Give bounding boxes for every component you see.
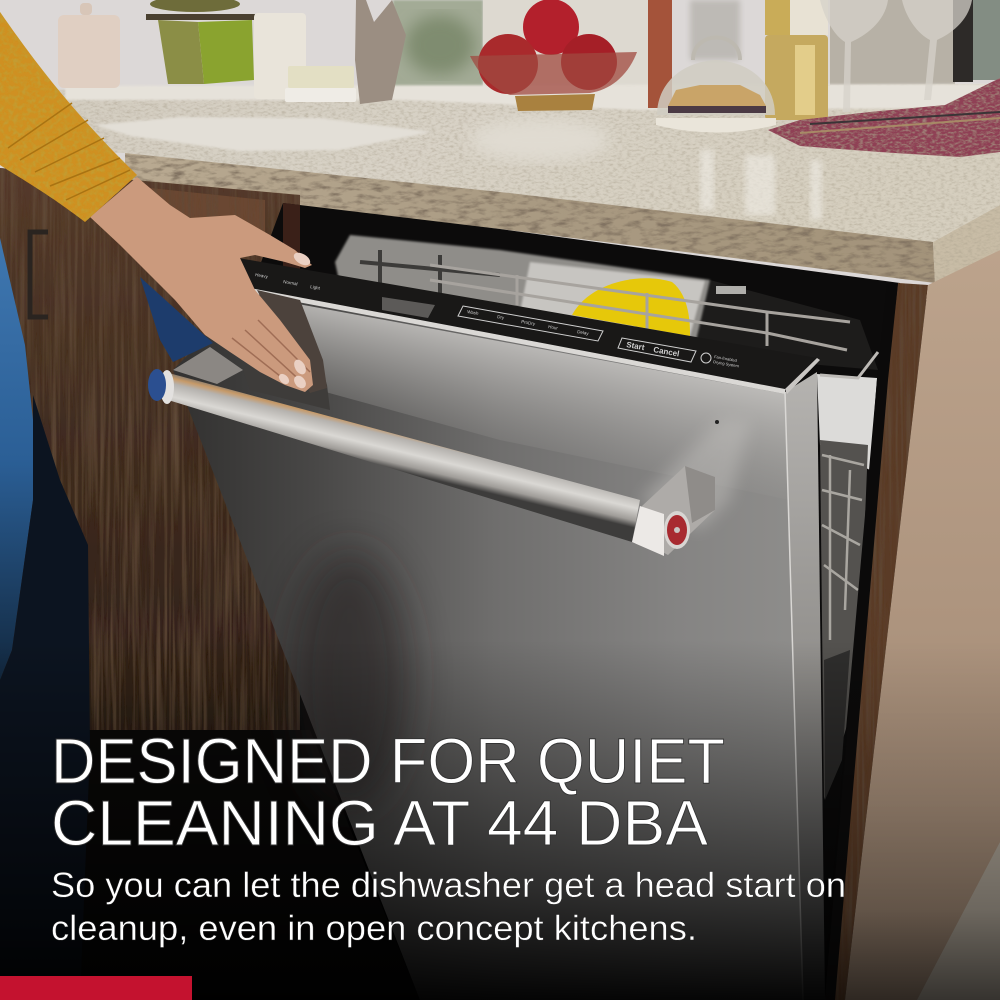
dish rack clip <box>820 352 878 378</box>
control panel strip: Hour <box>548 324 559 331</box>
wine bottle <box>765 0 828 120</box>
finger shadow strip <box>257 290 327 393</box>
light wood side panel <box>845 250 1000 1000</box>
control panel strip: Cancel <box>653 345 680 359</box>
black frame strip <box>822 283 898 1000</box>
control panel strip: Drying System <box>713 359 740 369</box>
bottom dark gradient left <box>0 640 855 1000</box>
control panel strip: Light <box>310 284 321 291</box>
control panel strip: ProDry <box>521 319 536 327</box>
dark door area beside fingers <box>243 300 330 410</box>
heading <box>51 725 725 859</box>
control panel strip <box>238 258 820 394</box>
door handle <box>148 369 715 556</box>
floor shadow <box>0 730 420 1000</box>
dishwasher opening <box>250 203 900 1000</box>
control panel strip: Wash <box>467 309 479 316</box>
dark trouser leg <box>0 395 90 1000</box>
control panel strip: Delay <box>577 329 590 336</box>
subheading <box>51 866 846 948</box>
jeans <box>0 238 33 680</box>
faucet <box>355 0 406 104</box>
control panel strip: Heavy <box>255 272 269 279</box>
fruit bowl with apples <box>470 0 637 111</box>
wine glasses <box>820 0 972 112</box>
subheading: So you can let the dishwasher get a head start on <box>51 866 846 905</box>
heading: DESIGNED FOR QUIET <box>51 725 725 797</box>
red napkin with cutlery <box>768 78 1000 157</box>
heading: CLEANING AT 44 DBA <box>51 787 708 859</box>
hand and forearm <box>90 177 313 392</box>
floor at bottom right <box>917 842 1000 1000</box>
countertop <box>0 84 1000 283</box>
dishwasher door <box>173 292 825 1000</box>
control panel strip: Normal <box>283 279 298 287</box>
jar, planter, candle and soap <box>58 0 356 102</box>
red accent bar <box>0 976 192 1000</box>
control panel strip: Dry <box>497 314 505 320</box>
brown side strip <box>825 283 928 1000</box>
cake dome <box>656 38 776 132</box>
wood recess under counter <box>150 188 265 232</box>
door indicator dot <box>715 420 719 424</box>
left wood cabinet <box>0 168 300 760</box>
control panel strip: Fan-Enabled <box>714 354 737 363</box>
background: kitchen wall and window <box>0 0 1000 300</box>
bottom dark gradient right <box>825 640 1000 1000</box>
control panel strip: Start <box>626 340 645 352</box>
blue reflection near hand <box>140 277 213 362</box>
door corner facet <box>173 347 243 384</box>
sink <box>95 117 432 151</box>
cabinet pull <box>30 232 48 317</box>
red bottle <box>648 0 672 108</box>
subheading: cleanup, even in open concept kitchens. <box>51 909 697 948</box>
yellow sweater sleeve <box>0 12 137 222</box>
